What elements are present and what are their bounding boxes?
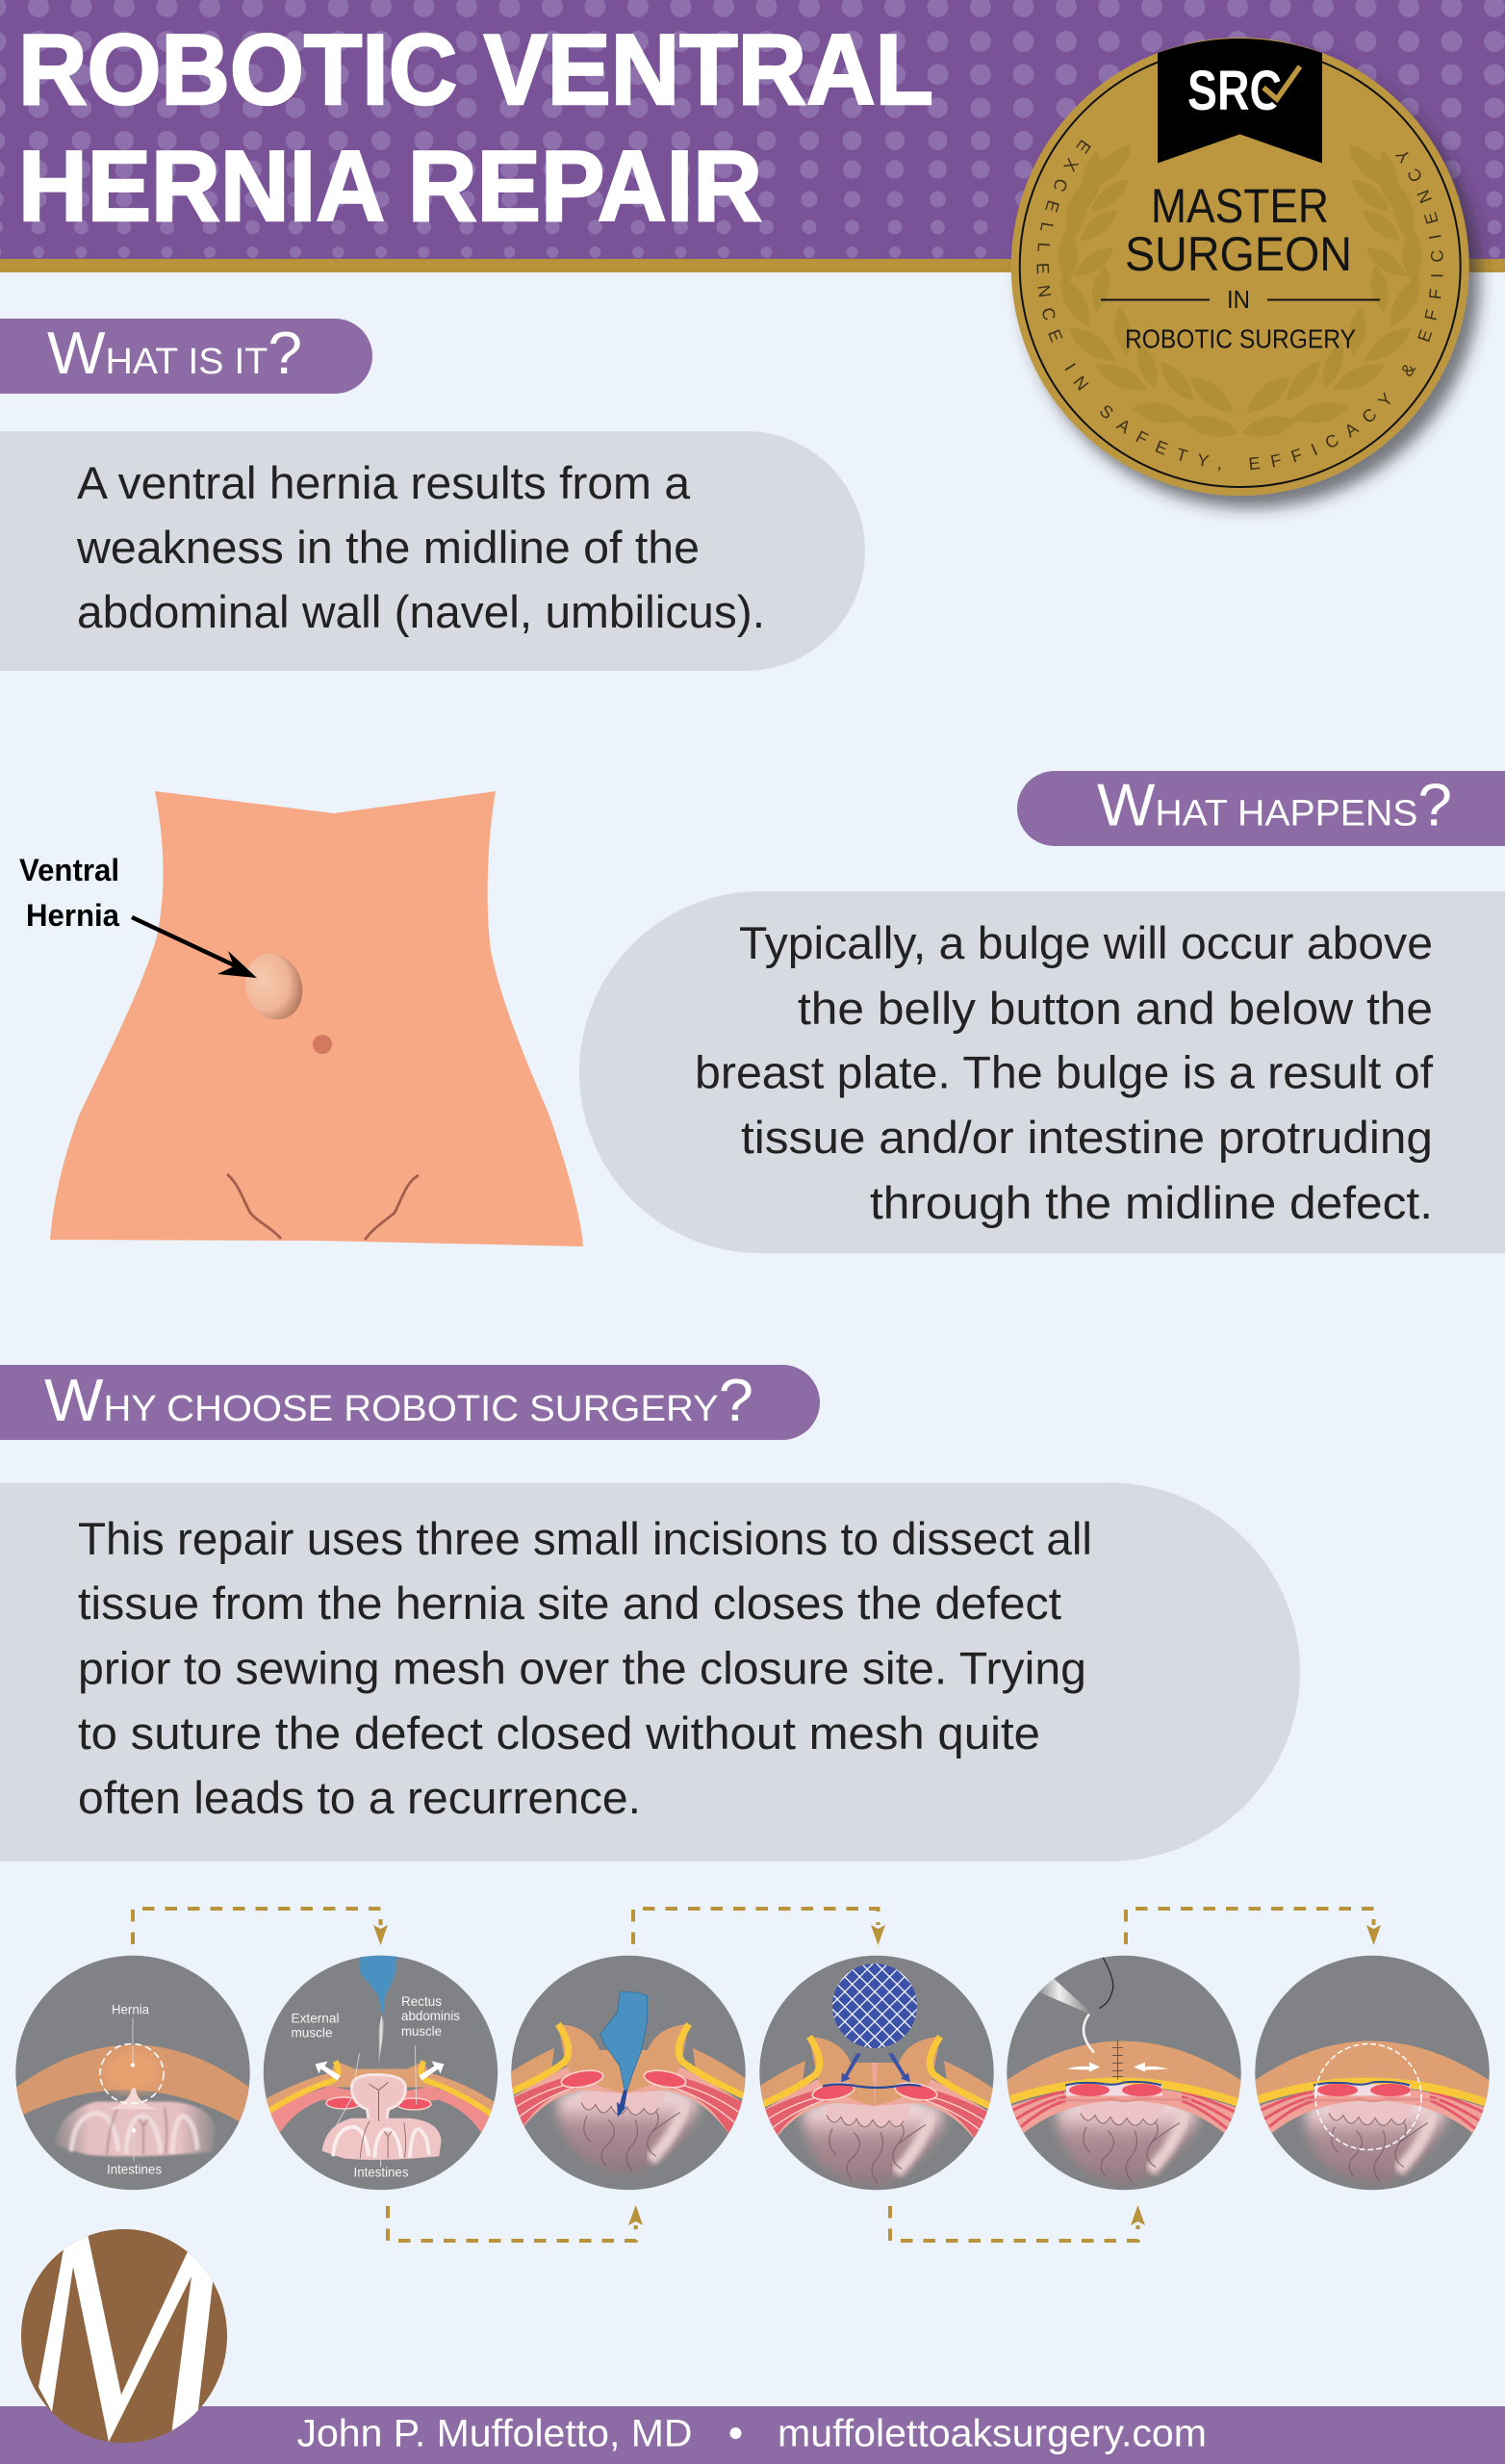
closed wall bbox=[1252, 2040, 1492, 2135]
labels: muscles and intestines bbox=[291, 1993, 460, 2179]
badge: master surgeon seal bbox=[1010, 38, 1492, 520]
arrow: step 4 to 5 bbox=[890, 2205, 1145, 2241]
heading: what is it bbox=[0, 319, 372, 394]
panel: why choose robotic surgery bbox=[0, 1482, 1300, 1861]
label: ventral hernia bbox=[19, 853, 119, 933]
circular motto: EXCELLENCE IN SAFETY, EFFICACY & EFFICIENCY bbox=[1036, 140, 1443, 472]
arrow: step 3 to 4 bbox=[633, 1909, 885, 1945]
panel: what is it: abdominal wall (navel, umbilicus). bbox=[77, 586, 765, 637]
tissue layers bbox=[266, 2063, 495, 2118]
panel: what happens: tissue and/or intestine protruding bbox=[741, 1112, 1433, 1163]
thread bbox=[1099, 1956, 1113, 2008]
closing arrows bbox=[1066, 2062, 1100, 2071]
blue instrument bbox=[617, 2091, 627, 2118]
closed wall bbox=[1004, 2040, 1244, 2135]
panel: why choose robotic surgery: tissue from the hernia site and closes the defect bbox=[78, 1578, 1061, 1629]
heading: why choose robotic surgery: WHY CHOOSE ROBOTIC SURGERY ? bbox=[44, 1368, 753, 1434]
label: Intestines: Intestines bbox=[107, 2162, 162, 2177]
glove bbox=[600, 1991, 648, 2091]
panel: what is it: A ventral hernia results from a bbox=[77, 457, 691, 508]
step 6: completed repair bbox=[1252, 1956, 1492, 2190]
labels: muscles and intestines: External bbox=[291, 2010, 339, 2025]
needle holder bbox=[1039, 1979, 1089, 2014]
panel: why choose robotic surgery: to suture the defect closed without mesh quite bbox=[78, 1707, 1040, 1758]
header banner bbox=[0, 0, 1505, 272]
heading: what happens bbox=[1017, 771, 1505, 846]
title bbox=[18, 14, 933, 243]
groin creases bbox=[227, 1174, 419, 1240]
label: ventral hernia: Ventral bbox=[19, 853, 119, 887]
labels: muscles and intestines: Rectus bbox=[401, 1993, 442, 2009]
mesh bbox=[832, 1964, 917, 2048]
intestines bbox=[557, 2085, 698, 2175]
needle bbox=[1084, 2014, 1094, 2052]
SRC logo: SRC bbox=[1187, 60, 1282, 122]
panel: what is it: weakness in the midline of the bbox=[76, 522, 700, 573]
panel: what happens: Typically, a bulge will occur above bbox=[739, 917, 1433, 968]
scalpel bbox=[377, 2015, 385, 2066]
heading: what happens: WHAT HAPPENS? bbox=[1097, 772, 1452, 839]
step 5: suturing bbox=[1004, 1956, 1244, 2190]
label: Hernia: Hernia bbox=[112, 2002, 149, 2017]
title: ROBOTIC VENTRAL bbox=[18, 14, 933, 126]
abdominal wall bbox=[13, 2044, 253, 2123]
intestines bbox=[55, 2102, 216, 2156]
intestines bbox=[1057, 2095, 1197, 2187]
labels: muscles and intestines: Intestines bbox=[354, 2164, 408, 2179]
intestines bbox=[1305, 2095, 1445, 2187]
laurel wreath bbox=[1052, 139, 1428, 442]
panel: what happens: breast plate. The bulge is a result of bbox=[695, 1047, 1434, 1097]
labels: muscles and intestines: muscle bbox=[401, 2023, 442, 2039]
arrow: step 5 to 6 bbox=[1126, 1909, 1381, 1945]
heading: what is it: WHAT IS IT? bbox=[47, 321, 302, 387]
badge heading: IN bbox=[1227, 285, 1250, 314]
arrow: step 1 to 2 bbox=[133, 1909, 388, 1945]
labels: muscles and intestines: abdominis bbox=[401, 2008, 460, 2023]
step 3: dissection bbox=[494, 1956, 753, 2190]
labels: muscles and intestines: muscle bbox=[291, 2025, 333, 2040]
title: HERNIA REPAIR bbox=[18, 131, 762, 243]
label: ventral hernia: Hernia bbox=[26, 898, 119, 933]
panel: why choose robotic surgery: often leads to a recurrence. bbox=[78, 1772, 641, 1823]
icon: hernia bulge bbox=[236, 945, 312, 1028]
badge heading bbox=[1101, 179, 1380, 354]
ribbon bbox=[1158, 38, 1322, 164]
panel: what happens bbox=[579, 891, 1505, 1253]
torso illustration bbox=[50, 791, 583, 1246]
step 1: hernia bbox=[13, 1956, 253, 2190]
panel: what is it bbox=[0, 431, 865, 671]
footer bar bbox=[0, 2406, 1505, 2464]
panel: why choose robotic surgery: This repair uses three small incisions to dissect all bbox=[78, 1513, 1092, 1564]
closure line bbox=[823, 2085, 921, 2088]
dashed outline bbox=[100, 2044, 164, 2104]
intestines bbox=[352, 2075, 406, 2123]
footer bar: John P. Muffoletto, MD bbox=[296, 2412, 693, 2454]
opened wall bbox=[494, 2024, 753, 2135]
sutures bbox=[1112, 2040, 1123, 2079]
badge heading: MASTER bbox=[1151, 179, 1329, 233]
step 4: mesh placement bbox=[745, 1956, 1005, 2190]
intestines bbox=[803, 2097, 943, 2189]
logo: M monogram bbox=[21, 2229, 227, 2443]
opened wall bbox=[760, 2035, 993, 2139]
panel: what happens: through the midline defect. bbox=[870, 1177, 1433, 1228]
panel: what happens: the belly button and below the bbox=[798, 983, 1433, 1034]
glove bbox=[360, 1956, 397, 2017]
badge heading: SURGEON bbox=[1125, 227, 1352, 281]
badge heading: ROBOTIC SURGERY bbox=[1125, 323, 1356, 354]
arrow: step 2 to 3 bbox=[388, 2205, 643, 2241]
panel: why choose robotic surgery: prior to sewing mesh over the closure site. Trying bbox=[78, 1642, 1086, 1694]
dashed outline bbox=[1315, 2044, 1421, 2150]
placement arrows bbox=[841, 2054, 861, 2083]
arrow: to hernia bbox=[132, 917, 257, 978]
footer bar: muffolettoaksurgery.com bbox=[778, 2412, 1207, 2454]
retraction arrows bbox=[316, 2062, 341, 2081]
icon: navel bbox=[313, 1035, 332, 1054]
step 2: incision bbox=[260, 1956, 500, 2190]
